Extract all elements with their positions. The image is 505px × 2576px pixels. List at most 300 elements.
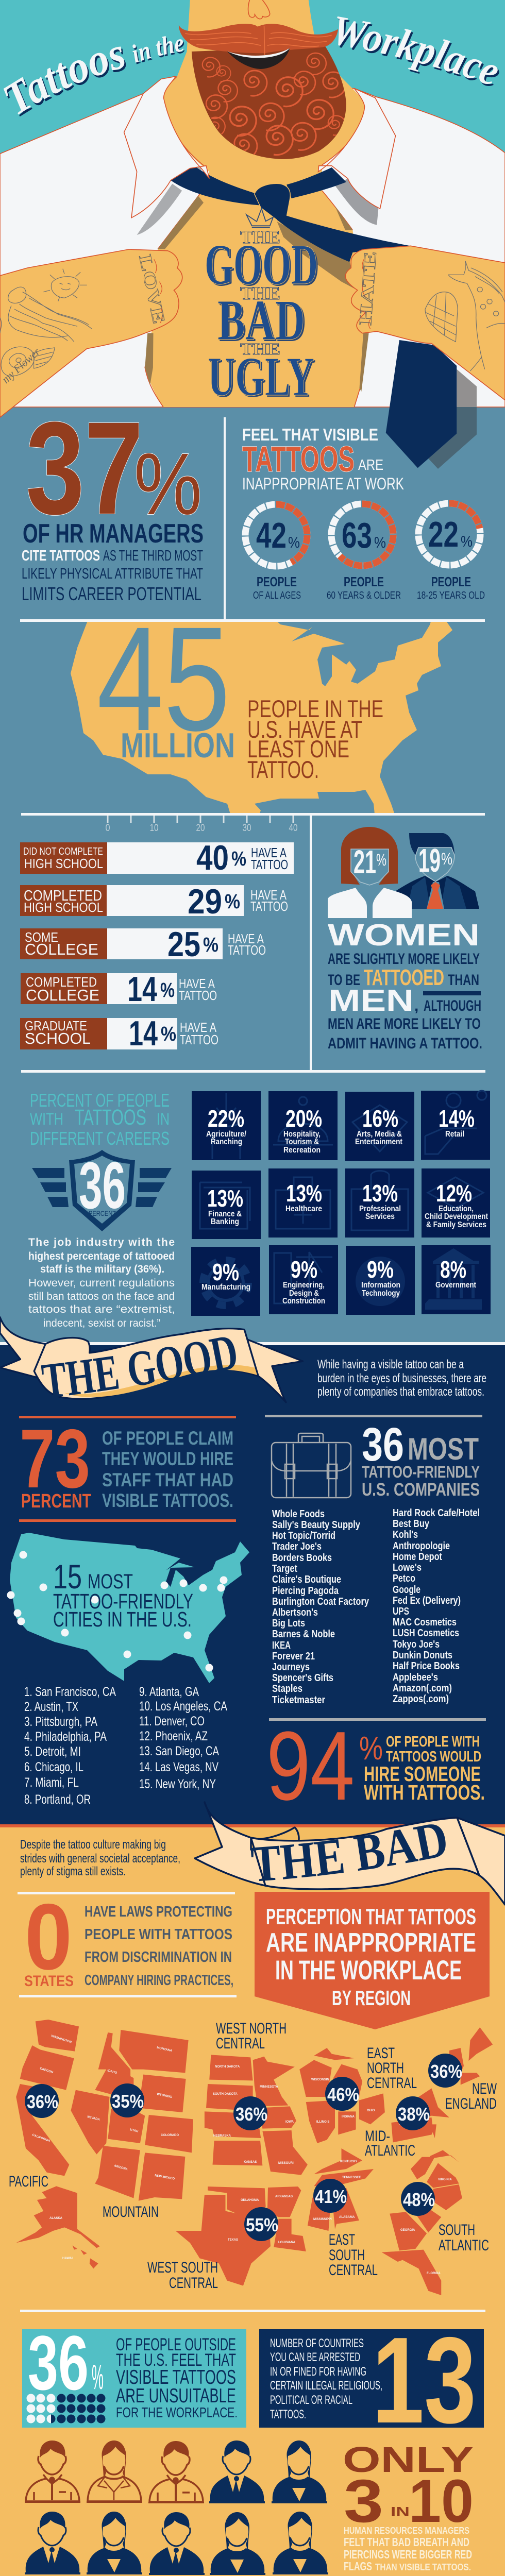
bar: completed high school: 29	[188, 882, 222, 921]
donut: 22 percent: PEOPLE	[431, 574, 471, 589]
list: tattoo friendly cities: 5. Detroit, MI	[24, 1744, 81, 1759]
card: hospitality	[268, 1091, 338, 1160]
banner: the good	[0, 1316, 304, 1403]
panel: 94 percent	[266, 1711, 486, 1821]
card: professional services	[345, 1168, 414, 1238]
company list: Anthropologie	[393, 1540, 450, 1552]
tie knot	[255, 183, 290, 223]
company list: Hard Rock Cafe/Hotel	[393, 1507, 480, 1519]
heading: ARE	[358, 457, 383, 473]
donut: 22 percent	[417, 503, 485, 601]
teal US map	[10, 1533, 249, 1683]
icon: briefcase	[272, 1433, 351, 1498]
military paragraph: indecent, sexist or racist.”	[43, 1317, 160, 1329]
only 3 in 10: 3	[344, 2467, 383, 2535]
manager text: AS THE THIRD MOST	[103, 548, 203, 564]
LOVE: LOVE	[135, 253, 169, 326]
card: engineering: Engineering,	[283, 1281, 325, 1290]
tiny state names: WISCONSIN	[311, 2078, 329, 2081]
bar: graduate school: TATTOO	[180, 1032, 218, 1047]
HATE: HATE	[356, 250, 380, 326]
tiny state names: OREGON	[39, 2067, 54, 2074]
region labels: ATLANTIC	[365, 2142, 415, 2159]
mouth	[227, 48, 290, 69]
tie tail	[277, 215, 411, 262]
tiny state names: LOUISIANA	[278, 2241, 296, 2244]
manager text: LIMITS CAREER POTENTIAL	[22, 583, 201, 604]
company list: Applebee's	[393, 1672, 438, 1683]
donut: 63 percent: PEOPLE	[344, 574, 384, 589]
bar: did not complete high school: HIGH SCHOOL	[24, 856, 103, 871]
panel: 36 percent outside US	[22, 2319, 246, 2428]
company list: Dunkin Donuts	[393, 1650, 452, 1661]
panel: 13 countries: TATTOOS.	[270, 2408, 306, 2421]
card: professional services: 13%	[362, 1180, 398, 1207]
region labels: EAST	[367, 2045, 395, 2062]
mustache	[179, 24, 338, 53]
caption: ARE UNSUITABLE	[116, 2385, 236, 2407]
banner: the bad	[194, 1801, 505, 1906]
region labels: SOUTH	[439, 2222, 475, 2239]
card: healthcare: Healthcare	[285, 1205, 322, 1213]
map heading: TATTOO-FRIENDLY	[53, 1589, 193, 1613]
women text	[328, 918, 482, 1052]
title: in the	[133, 38, 184, 64]
panel: 36 percent outside US: 36	[28, 2319, 89, 2406]
callout: perception by region: BY REGION	[332, 1986, 411, 2010]
card: finance: Banking	[211, 1217, 239, 1226]
company list: Forever 21	[272, 1651, 315, 1662]
face and chest skin	[145, 0, 367, 407]
region labels: PACIFIC	[9, 2173, 48, 2190]
bar: graduate school: HAVE A	[180, 1020, 216, 1035]
caption: THAN VISIBLE TATTOOS.	[375, 2562, 471, 2572]
region labels: CENTRAL	[367, 2075, 417, 2092]
shirt	[0, 86, 505, 407]
caption: OF PEOPLE OUTSIDE	[116, 2335, 236, 2354]
bar: graduate school: SCHOOL	[25, 1029, 91, 1047]
card: professional services: Services	[365, 1212, 395, 1221]
tiny state names: FLORIDA	[427, 2272, 441, 2275]
people icons	[25, 2441, 328, 2575]
city dots	[7, 1551, 228, 1671]
bar: graduate school	[20, 1014, 218, 1053]
military paragraph: highest percentage of tattooed	[28, 1250, 175, 1262]
region percent circles: 46%	[327, 2084, 359, 2105]
company list: Piercing Pagoda	[272, 1585, 339, 1597]
company list: Target	[272, 1563, 297, 1574]
bar: completed college: 14	[127, 970, 157, 1009]
tiny state names: KANSAS	[244, 2161, 257, 2164]
card: engineering: 9%	[291, 1256, 317, 1283]
tiny state names: NEW MEXICO	[155, 2174, 175, 2181]
panel: 13 countries: POLITICAL OR RACIAL	[270, 2393, 352, 2407]
list: tattoo friendly cities: 2. Austin, TX	[24, 1700, 78, 1714]
THE BAD: THE	[240, 283, 280, 303]
bar: some college: COLLEGE	[25, 940, 98, 958]
bar: graduate school: GRADUATE	[25, 1018, 87, 1033]
panel: 36 most tattoo-friendly companies: MOST	[408, 1432, 479, 1466]
list: tattoo friendly cities: 11. Denver, CO	[139, 1714, 205, 1728]
heading: TATTOOS	[242, 439, 355, 479]
region percent circles: 36%	[27, 2091, 58, 2112]
bar: completed college: %	[160, 979, 175, 1002]
list: tattoo friendly cities: 8. Portland, OR	[24, 1792, 91, 1807]
card: hospitality: Recreation	[283, 1146, 321, 1155]
nose	[248, 0, 270, 19]
region percent circles: 36%	[235, 2104, 267, 2125]
tiny state names: NORTH DAKOTA	[215, 2065, 240, 2069]
region labels: WEST SOUTH	[147, 2259, 218, 2276]
card: information technology: Information	[361, 1281, 400, 1290]
company list: Hot Topic/Torrid	[272, 1530, 335, 1541]
manager text: CITE TATTOOS	[22, 548, 100, 564]
military paragraph: The job industry with the	[28, 1236, 175, 1248]
company list: Amazon(.com)	[393, 1683, 452, 1694]
panel: careers heading: IN	[157, 1110, 170, 1128]
card: hospitality: 20%	[285, 1105, 322, 1132]
card: hospitality: Tourism &	[285, 1138, 319, 1146]
panel: 73 percent: VISIBLE TATTOOS.	[102, 1490, 233, 1511]
list: tattoo friendly cities: 7. Miami, FL	[24, 1775, 79, 1790]
only 3 in 10: 10	[409, 2467, 474, 2535]
panel: 0 states: PEOPLE WITH TATTOOS	[85, 1926, 232, 1943]
bar: completed high school: COMPLETED	[24, 888, 102, 904]
THE BAD: BAD	[219, 290, 307, 354]
only 3 in 10	[343, 2439, 474, 2535]
beard	[192, 46, 346, 159]
company list: Staples	[272, 1683, 302, 1694]
THE BAD: BAD	[217, 289, 305, 352]
region percent circles: 36%	[430, 2061, 462, 2082]
card: government: 8%	[440, 1256, 466, 1283]
panel: 94 percent: %	[359, 1730, 383, 1767]
icon: military shield badge 36 percent: 36	[79, 1149, 126, 1223]
people in the US caption: LEAST ONE	[247, 735, 349, 762]
THE GOOD	[205, 227, 319, 298]
card: finance	[192, 1171, 261, 1239]
company list: Spencer's Gifts	[272, 1672, 333, 1684]
bar: some college	[20, 925, 266, 964]
axis	[105, 816, 298, 834]
tiny state names: MINNESOTA	[260, 2086, 278, 2089]
tie lower blade	[386, 340, 457, 468]
company list: LUSH Cosmetics	[393, 1628, 459, 1639]
intro text: the good	[317, 1358, 486, 1399]
US map	[71, 618, 452, 819]
title	[3, 16, 499, 116]
card: retail: 14%	[439, 1105, 475, 1132]
company list: Home Depot	[393, 1551, 442, 1563]
donut: 63 percent	[327, 504, 401, 601]
donut: 22 percent: %	[461, 533, 473, 550]
region labels: SOUTH	[329, 2247, 365, 2264]
panel: women vs men	[328, 827, 482, 1052]
company list: MAC Cosmetics	[393, 1617, 457, 1628]
THE GOOD: GOOD	[206, 234, 319, 298]
big 37 percent: %	[134, 435, 202, 533]
bar: completed college: HAVE A	[179, 976, 215, 991]
tiny state names: WASHINGTON	[50, 2035, 72, 2044]
THE UGLY: THE	[240, 340, 280, 358]
company list: Big Lots	[272, 1618, 305, 1629]
bar: graduate school: 14	[129, 1014, 158, 1053]
dot grid	[27, 2394, 105, 2424]
caption	[116, 2335, 238, 2420]
tiny state names: ARKANSAS	[275, 2195, 293, 2198]
donut: 42 percent: PEOPLE	[257, 574, 297, 589]
tiny state names: PENNSYLVANIA	[399, 2123, 424, 2126]
bar: did not complete high school: %	[231, 848, 246, 870]
list: tattoo friendly cities: 3. Pittsburgh, PA	[24, 1715, 97, 1729]
axis: 10	[149, 823, 159, 834]
axis: 40	[289, 823, 298, 834]
panel: 73 percent: 73	[20, 1412, 90, 1505]
panel: visible tattoos inappropriate	[242, 425, 485, 601]
bar: completed college: TATTOO	[179, 988, 217, 1003]
donut: 63 percent: 63	[342, 515, 372, 555]
tiny state names: TEXAS	[228, 2239, 238, 2242]
bar: completed high school: HAVE A	[250, 887, 287, 903]
bar: some college: HAVE A	[228, 931, 264, 946]
military paragraph: However, current regulations	[28, 1277, 175, 1289]
list: tattoo friendly cities	[24, 1685, 227, 1807]
bar: some college: SOME	[25, 929, 58, 945]
card: arts media	[345, 1092, 414, 1161]
card: engineering	[269, 1245, 338, 1314]
card: education	[422, 1168, 490, 1238]
donut: 63 percent: %	[374, 534, 386, 551]
intro text: the bad	[20, 1838, 180, 1878]
region percent circles: 41%	[315, 2186, 347, 2207]
bar: some college: 25	[167, 925, 200, 964]
card: agriculture: Ranching	[211, 1138, 242, 1146]
manager text: LIKELY PHYSICAL ATTRIBUTE THAT	[22, 566, 203, 582]
card: information technology	[346, 1246, 415, 1315]
man icon: 19	[418, 842, 441, 879]
panel: careers heading: WITH	[30, 1110, 63, 1128]
panel: 13 countries: YOU CAN BE ARRESTED	[270, 2350, 360, 2364]
panel: 13 countries: IN OR FINED FOR HAVING	[270, 2365, 366, 2379]
card: agriculture: Agriculture/	[206, 1130, 246, 1139]
tiny state names: MONTANA	[157, 2046, 173, 2053]
states	[16, 2020, 493, 2295]
card: engineering: Design &	[289, 1289, 319, 1298]
left hand	[0, 249, 182, 417]
military paragraph: staff is the military (36%).	[40, 1263, 164, 1275]
caption: VISIBLE TATTOOS	[116, 2366, 236, 2388]
panel: 0 states	[18, 1884, 237, 1997]
panel: 13 countries: NUMBER OF COUNTRIES	[270, 2336, 364, 2350]
THE UGLY: UGLY	[209, 348, 316, 409]
people in the US caption: PEOPLE IN THE	[247, 695, 383, 722]
divider	[20, 2310, 485, 2312]
big 37 percent: 37	[26, 395, 143, 542]
military paragraph: tattoos that are “extremist,	[28, 1303, 175, 1315]
bar: did not complete high school: HAVE A	[251, 845, 287, 860]
list: tattoo friendly cities: 12. Phoenix, AZ	[139, 1729, 208, 1743]
banner: the bad: THE BAD	[250, 1824, 446, 1882]
tattoo lettering on hands	[0, 250, 380, 386]
axis: 0	[105, 823, 110, 834]
panel: 73 percent: PERCENT	[21, 1490, 91, 1512]
heading: FEEL THAT VISIBLE	[242, 425, 378, 444]
card: government: Government	[435, 1281, 477, 1290]
people in the US caption	[247, 695, 383, 783]
company list: Albertson's	[272, 1607, 318, 1618]
tiny state names: KENTUCKY	[340, 2160, 357, 2163]
tiny state names: IOWA	[285, 2121, 294, 2124]
bar: completed high school: %	[225, 890, 240, 913]
people in the US caption: U.S. HAVE AT	[247, 716, 362, 743]
panel: careers heading	[30, 1090, 170, 1149]
women text: TO BE	[328, 972, 360, 989]
list: tattoo friendly cities: 15. New York, NY	[139, 1777, 216, 1791]
company list: Lowe's	[393, 1562, 422, 1573]
tiny state names: ALASKA	[49, 2217, 63, 2220]
card: education: Education,	[439, 1205, 474, 1213]
dividers: first blue section	[20, 417, 485, 1073]
donut: 63 percent: 60 YEARS & OLDER	[327, 590, 401, 601]
panel: 73 percent: OF PEOPLE CLAIM	[102, 1428, 233, 1449]
THE BAD	[217, 283, 307, 354]
manager text	[22, 519, 204, 604]
panel: 45 million map	[71, 622, 452, 813]
company list: Claire's Boutique	[272, 1574, 341, 1585]
tiny state names: TENNESSEE	[342, 2176, 361, 2179]
bar: did not complete high school	[20, 838, 294, 877]
company list: UPS	[393, 1606, 409, 1617]
list: tattoo friendly cities: 4. Philadelphia, PA	[24, 1730, 107, 1744]
tattoo drawings: sun, mermaid, rose, heart, unicorn	[0, 261, 505, 376]
card: manufacturing	[191, 1247, 260, 1316]
company list: IKEA	[272, 1640, 291, 1651]
company list: Best Buy	[393, 1518, 430, 1530]
bar: some college: TATTOO	[228, 942, 266, 958]
company list: Fed Ex (Delivery)	[393, 1595, 461, 1606]
man icon	[395, 833, 479, 909]
card: arts media: 16%	[362, 1105, 398, 1132]
THE GOOD: THE	[240, 227, 280, 247]
region labels: EAST	[329, 2231, 355, 2248]
region labels: NORTH	[367, 2060, 404, 2077]
region labels: CENTRAL	[169, 2275, 218, 2292]
tiny state names: GEORGIA	[400, 2229, 415, 2232]
bar: completed high school: HIGH SCHOOL	[24, 900, 103, 915]
region labels: CENTRAL	[329, 2262, 378, 2279]
list: tattoo friendly cities: 9. Atlanta, GA	[139, 1685, 199, 1699]
caption: HUMAN RESOURCES MANAGERS	[344, 2526, 469, 2536]
company list: Barnes & Noble	[272, 1629, 335, 1640]
panel: 73 percent: STAFF THAT HAD	[102, 1469, 233, 1490]
list: tattoo friendly cities: 10. Los Angeles, CA	[139, 1699, 227, 1714]
panel: education bar chart	[20, 816, 298, 1053]
region percent circles: 48%	[403, 2189, 435, 2210]
tiny state names: ALABAMA	[339, 2216, 355, 2219]
man icon: %	[441, 850, 452, 868]
title: Workplace	[337, 16, 498, 84]
panel: 3 in 10 HR managers	[25, 2439, 474, 2575]
panel: 0 states: COMPANY HIRING PRACTICES,	[85, 1972, 233, 1989]
donut: 22 percent: 22	[428, 514, 459, 554]
map heading: MOST	[88, 1570, 133, 1593]
tiny state names: CALIFORNIA	[31, 2133, 51, 2143]
women text: THAN	[448, 972, 479, 989]
tie band	[171, 167, 346, 205]
bar: completed high school	[20, 882, 288, 921]
card: education: 12%	[436, 1180, 472, 1207]
tiny state names: NEVADA	[87, 2115, 100, 2122]
card: information technology: Technology	[362, 1289, 400, 1298]
tiny state names: COLORADO	[161, 2134, 179, 2137]
card: retail: Retail	[445, 1130, 464, 1139]
THE UGLY: UGLY	[208, 346, 314, 408]
list: tattoo friendly cities: 6. Chicago, IL	[24, 1760, 83, 1774]
company list: Half Price Books	[393, 1660, 460, 1672]
tiny state names: OHIO	[367, 2109, 375, 2112]
region percent circles: 35%	[112, 2091, 144, 2112]
only 3 in 10: ONLY	[343, 2439, 474, 2480]
woman icon: 21	[354, 843, 376, 880]
card: healthcare	[268, 1168, 338, 1238]
tiny state names: ILLINOIS	[316, 2121, 329, 2124]
title: Workplace	[339, 19, 499, 86]
donut: 42 percent: %	[288, 534, 300, 551]
panel: careers heading: DIFFERENT CAREERS	[30, 1128, 170, 1149]
company list: Burlington Coat Factory	[272, 1596, 369, 1607]
card: agriculture: 22%	[208, 1105, 244, 1132]
card: arts media: Arts, Media &	[357, 1130, 402, 1139]
company list	[272, 1507, 480, 1706]
panel: careers heading: PERCENT OF PEOPLE	[30, 1090, 170, 1111]
caption: THE U.S. FEEL THAT	[116, 2350, 236, 2370]
card: information technology: 9%	[367, 1256, 394, 1283]
chest tattoo lettering	[205, 227, 319, 409]
panel: 0 states: STATES	[24, 1973, 74, 1990]
company list: Sally's Beauty Supply	[272, 1519, 361, 1531]
crown tattoo	[246, 209, 273, 228]
bar: some college: %	[203, 934, 218, 956]
card: manufacturing: 9%	[212, 1259, 239, 1285]
region labels: MID-	[365, 2128, 390, 2145]
panel: careers heading: TATTOOS	[75, 1105, 146, 1130]
region percent circles: 55%	[246, 2214, 278, 2235]
axis: 30	[242, 823, 251, 834]
bar: completed high school: TATTOO	[250, 899, 288, 914]
card: arts media: Entertainment	[355, 1138, 403, 1146]
panel: 13 countries: 13	[372, 2312, 476, 2449]
donut: 42 percent: 42	[256, 515, 287, 555]
list: tattoo friendly cities: 1. San Francisco, CA	[24, 1685, 116, 1699]
women text: WOMEN	[328, 918, 480, 952]
panel: 37 percent of HR managers	[22, 395, 204, 604]
tie lower blade shadow	[457, 369, 477, 407]
finger creases	[154, 259, 371, 329]
caption	[344, 2526, 472, 2573]
card: retail	[421, 1091, 490, 1160]
women text: ,	[414, 997, 418, 1014]
collar shadows	[137, 167, 201, 235]
card: manufacturing: Manufacturing	[201, 1283, 250, 1292]
my flower script: my Flower	[0, 345, 43, 386]
map heading	[53, 1557, 193, 1631]
panel: 13 countries	[259, 2312, 484, 2449]
tiny state names: NEBRASKA	[213, 2134, 231, 2138]
bar: graduate school: %	[161, 1023, 176, 1045]
THE UGLY	[208, 340, 316, 409]
company list: Trader Joe's	[272, 1541, 322, 1552]
axis: 20	[196, 823, 205, 834]
